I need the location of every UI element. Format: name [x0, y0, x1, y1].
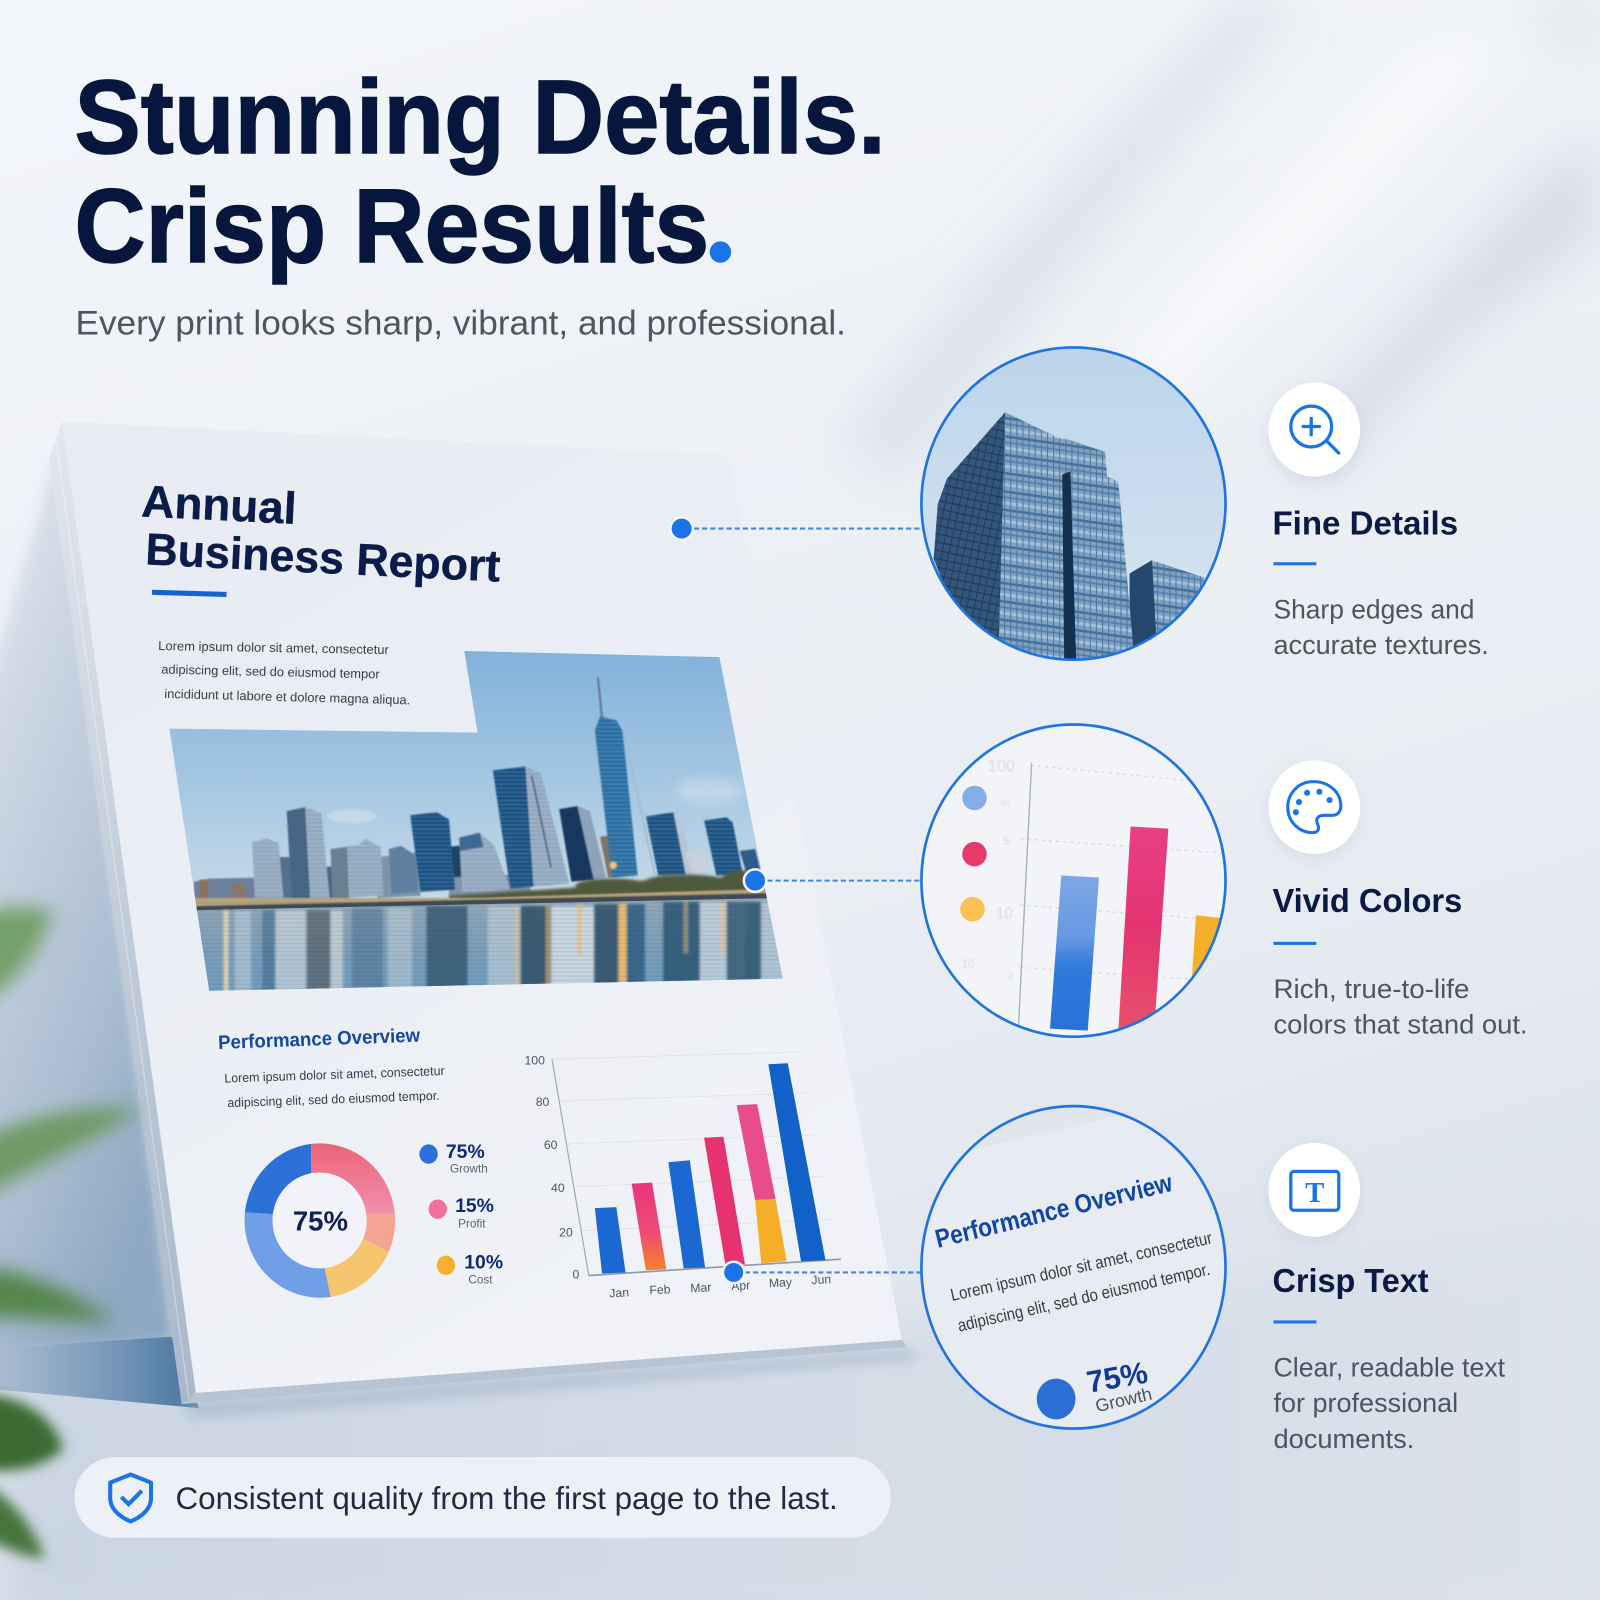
zoom circle: crisp text: Growth — [1093, 1384, 1154, 1416]
feature: vivid colors: colors that stand out. — [1273, 1010, 1528, 1040]
report intro text: incididunt ut labore et dolore magna aliqua. — [164, 686, 410, 707]
bar chart: 0 — [572, 1268, 579, 1282]
zoom circle: vivid chart colors: 10 — [996, 905, 1013, 922]
zoom circle: crisp text — [918, 1104, 1229, 1431]
zoom circle: vivid chart colors: 40 — [1000, 799, 1010, 808]
bar chart: May — [768, 1275, 793, 1290]
feature: crisp text — [1268, 1143, 1506, 1454]
bar chart: 20 — [559, 1226, 573, 1240]
performance overview heading: Performance Overview — [218, 1025, 421, 1054]
feature: crisp text: documents. — [1273, 1424, 1414, 1454]
feature: fine details: accurate textures. — [1273, 630, 1489, 660]
feature: crisp text: Clear, readable text — [1273, 1353, 1506, 1383]
feature: fine details: Fine Details — [1272, 506, 1458, 543]
zoom circle: vivid chart colors: 10 — [961, 956, 975, 970]
bar chart: Apr — [731, 1278, 750, 1293]
wall shadow behind the report — [0, 449, 918, 1418]
zoom circle: crisp text: adipiscing elit, sed do eiusmod tempor. — [956, 1259, 1212, 1336]
bar chart: 60 — [544, 1138, 558, 1152]
donut legend: Profit — [458, 1218, 486, 1231]
donut legend: 15% — [455, 1195, 494, 1217]
front page — [62, 421, 902, 1393]
icon: text box — [1268, 1143, 1360, 1237]
icon: magnifier — [1268, 383, 1360, 477]
background low-rise — [193, 877, 256, 899]
report intro text: adipiscing elit, sed do eiusmod tempor — [161, 661, 381, 681]
report heading: Business Report — [144, 523, 502, 592]
performance text — [224, 1063, 446, 1110]
callout connectors — [670, 517, 921, 1283]
bar chart: 40 — [551, 1181, 565, 1195]
title — [74, 59, 886, 285]
donut legend — [419, 1141, 503, 1287]
title: Stunning Details. — [74, 59, 886, 176]
bars — [595, 1207, 626, 1273]
blurred plant leaves — [0, 907, 141, 1559]
report document stack — [49, 421, 906, 1404]
bar chart: Jan — [609, 1285, 630, 1300]
bar chart: 80 — [536, 1095, 550, 1109]
feature: crisp text: Crisp Text — [1272, 1263, 1429, 1300]
report heading underline — [152, 590, 227, 597]
bar chart: Mar — [690, 1280, 712, 1295]
midtown buildings — [252, 839, 284, 902]
page stack edges — [49, 421, 906, 1404]
feature: vivid colors: Vivid Colors — [1272, 883, 1462, 920]
donut legend: Cost — [468, 1274, 493, 1287]
tall tower — [598, 678, 602, 718]
zoom circle: crisp text: Lorem ipsum dolor sit amet, consectetur — [949, 1227, 1214, 1305]
bar chart: Jun — [811, 1272, 832, 1287]
feature: crisp text: for professional — [1273, 1388, 1458, 1418]
title: Crisp Results — [74, 168, 709, 285]
bar chart: 100 — [524, 1053, 545, 1067]
zoom circle: vivid chart colors: 2 — [1008, 972, 1013, 982]
bottom pill callout — [74, 1457, 891, 1538]
icon: shield check — [110, 1474, 151, 1521]
icon: palette — [1268, 760, 1360, 854]
zoom circle: crisp text: 75% — [1084, 1356, 1150, 1400]
waterfront trees — [449, 870, 767, 904]
performance text: Lorem ipsum dolor sit amet, consectetur — [224, 1063, 446, 1086]
donut chart — [245, 1143, 395, 1298]
donut legend: 75% — [446, 1141, 485, 1163]
bar chart — [524, 1052, 841, 1300]
feature: vivid colors — [1268, 760, 1528, 1040]
feature: fine details: Sharp edges and — [1273, 594, 1474, 624]
report skyline photo — [170, 651, 782, 991]
feature: fine details — [1268, 383, 1489, 660]
icon: text box: T — [1305, 1178, 1324, 1209]
zoom circle: crisp text: Performance Overview — [932, 1167, 1176, 1254]
zoom circle: vivid chart colors: 5 — [1003, 834, 1010, 848]
report intro text — [158, 638, 410, 707]
donut legend: Growth — [450, 1162, 488, 1175]
report heading: Annual — [140, 475, 298, 534]
bar chart: Feb — [649, 1282, 671, 1297]
zoom circle: building — [918, 345, 1229, 673]
report intro text: Lorem ipsum dolor sit amet, consectetur — [158, 638, 390, 657]
donut chart: 75% — [293, 1206, 348, 1237]
water reflection — [197, 898, 782, 991]
subtitle: Every print looks sharp, vibrant, and professional. — [76, 305, 846, 343]
donut legend: 10% — [464, 1251, 503, 1273]
zoom circle: vivid chart colors — [918, 722, 1229, 1041]
feature: vivid colors: Rich, true-to-life — [1273, 974, 1469, 1004]
bottom pill callout: Consistent quality from the first page to the last. — [176, 1480, 838, 1516]
zoom circle: vivid chart colors: 100 — [988, 757, 1015, 775]
shoreline — [194, 889, 776, 906]
performance text: adipiscing elit, sed do eiusmod tempor. — [227, 1088, 440, 1110]
report heading — [140, 475, 502, 592]
